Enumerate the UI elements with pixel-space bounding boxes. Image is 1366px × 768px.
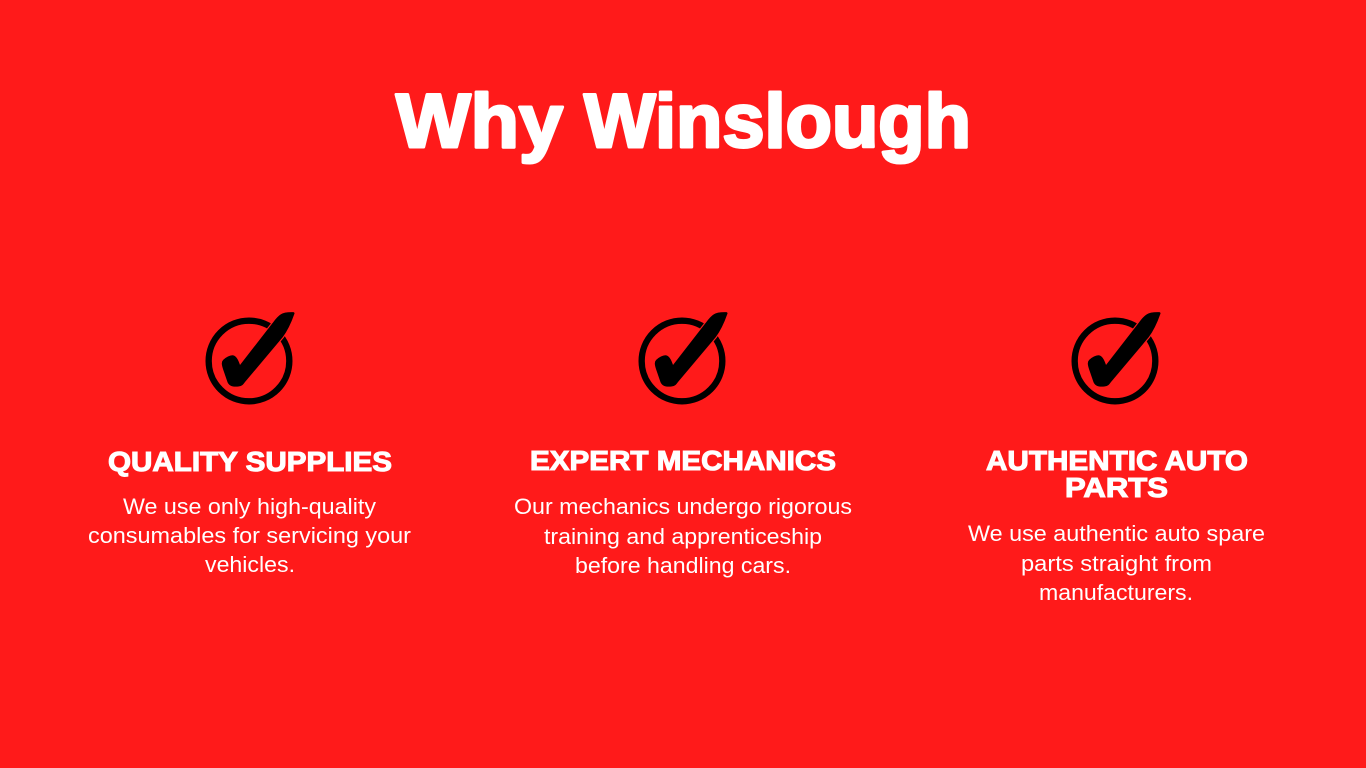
icon: check mark in circle: [642, 313, 726, 401]
text block: We use authentic auto spare: [968, 521, 1265, 546]
heading: [986, 445, 1248, 503]
heading: QUALITY SUPPLIES: [108, 446, 392, 477]
text block: Our mechanics undergo rigorous: [514, 494, 852, 519]
text block: consumables for servicing your: [88, 523, 411, 548]
title: Why: [396, 79, 563, 164]
text block: [514, 494, 852, 578]
text block: We use only high-quality: [123, 494, 376, 519]
text block: vehicles.: [205, 552, 295, 577]
title: Winslough: [584, 79, 971, 164]
heading: EXPERT MECHANICS: [530, 445, 836, 476]
text block: training and apprenticeship: [544, 524, 822, 549]
text block: parts straight from: [1021, 551, 1212, 576]
text block: [88, 494, 411, 577]
icon: check mark in circle: [1075, 313, 1159, 401]
heading: PARTS: [1065, 472, 1168, 503]
text block: before handling cars.: [575, 553, 791, 578]
panel: authentic auto parts: [968, 313, 1265, 605]
panel: quality supplies: [88, 313, 411, 577]
title: [396, 79, 971, 164]
panel: expert mechanics: [514, 313, 852, 578]
heading: AUTHENTIC AUTO: [986, 445, 1248, 476]
icon: check mark in circle: [209, 313, 293, 401]
text block: manufacturers.: [1039, 580, 1193, 605]
text block: [968, 521, 1265, 605]
